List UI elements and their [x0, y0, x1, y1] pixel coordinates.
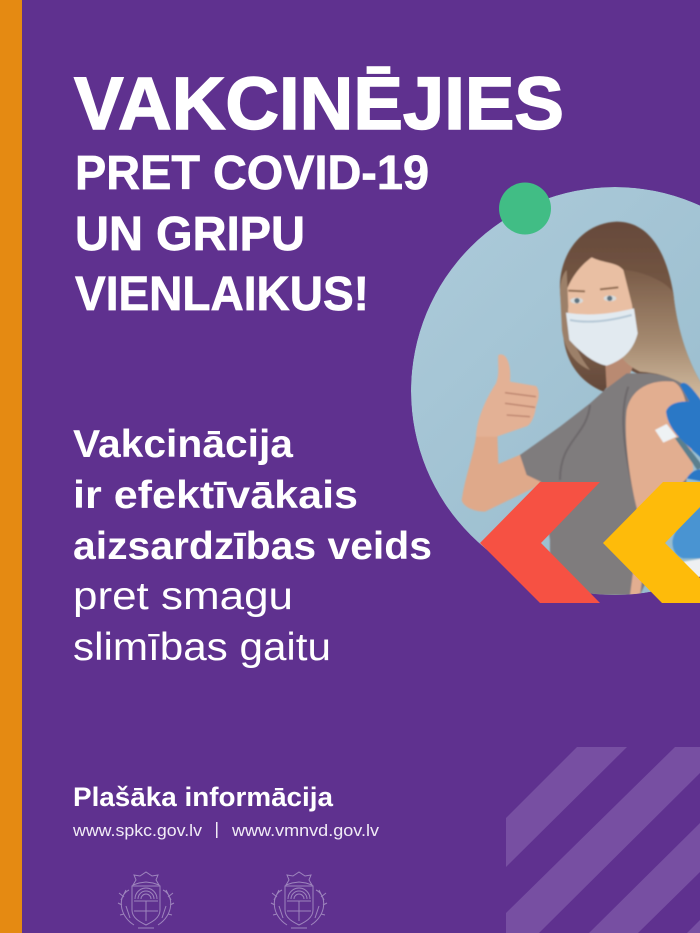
face mask [566, 308, 638, 366]
woman figure [462, 222, 700, 595]
eyes [570, 298, 583, 304]
photo: vaccinated woman in circle [411, 187, 700, 595]
orange side bar [0, 0, 22, 933]
back hair [559, 220, 674, 392]
title line 3: UN GRIPU [75, 208, 305, 261]
title line 2: PRET COVID-19 [75, 147, 429, 200]
link vmnvd: www.vmnvd.gov.lv [231, 821, 380, 840]
title line 4: VIENLAIKUS! [75, 268, 369, 321]
yellow chevron [603, 482, 700, 603]
green dot [499, 182, 551, 234]
link spkc: www.spkc.gov.lv [72, 821, 203, 840]
blond hair over shoulder [618, 270, 700, 403]
decorative diagonal stripes [506, 747, 700, 933]
face [566, 256, 634, 316]
cotton pad [655, 424, 677, 443]
neck [604, 358, 633, 388]
website links [72, 821, 380, 840]
more information heading: Plašāka informācija [73, 782, 334, 812]
emblem right [271, 872, 327, 928]
message regular line 4: pret smagu [73, 575, 293, 618]
forearm [462, 433, 543, 512]
left hair strand [560, 270, 590, 370]
emblem left [118, 872, 174, 928]
red chevron [480, 482, 600, 603]
message text [73, 423, 432, 669]
white cuff [683, 558, 700, 578]
message bold line 2: ir efektīvākais [73, 474, 358, 517]
thumbs-up hand [476, 354, 539, 437]
photo backdrop [411, 187, 700, 595]
blue glove middle [687, 469, 700, 482]
title line 1: VAKCINĒJIES [74, 62, 564, 145]
message bold line 1: Vakcinācija [73, 423, 293, 466]
title [74, 62, 564, 321]
blue glove upper [666, 383, 700, 460]
separator [216, 822, 218, 838]
syringe [675, 437, 700, 470]
bare shoulder [626, 381, 693, 595]
shirt [520, 373, 697, 595]
message regular line 5: slimības gaitu [73, 626, 331, 669]
blue glove lower [673, 503, 700, 558]
message bold line 3: aizsardzības veids [73, 525, 432, 568]
